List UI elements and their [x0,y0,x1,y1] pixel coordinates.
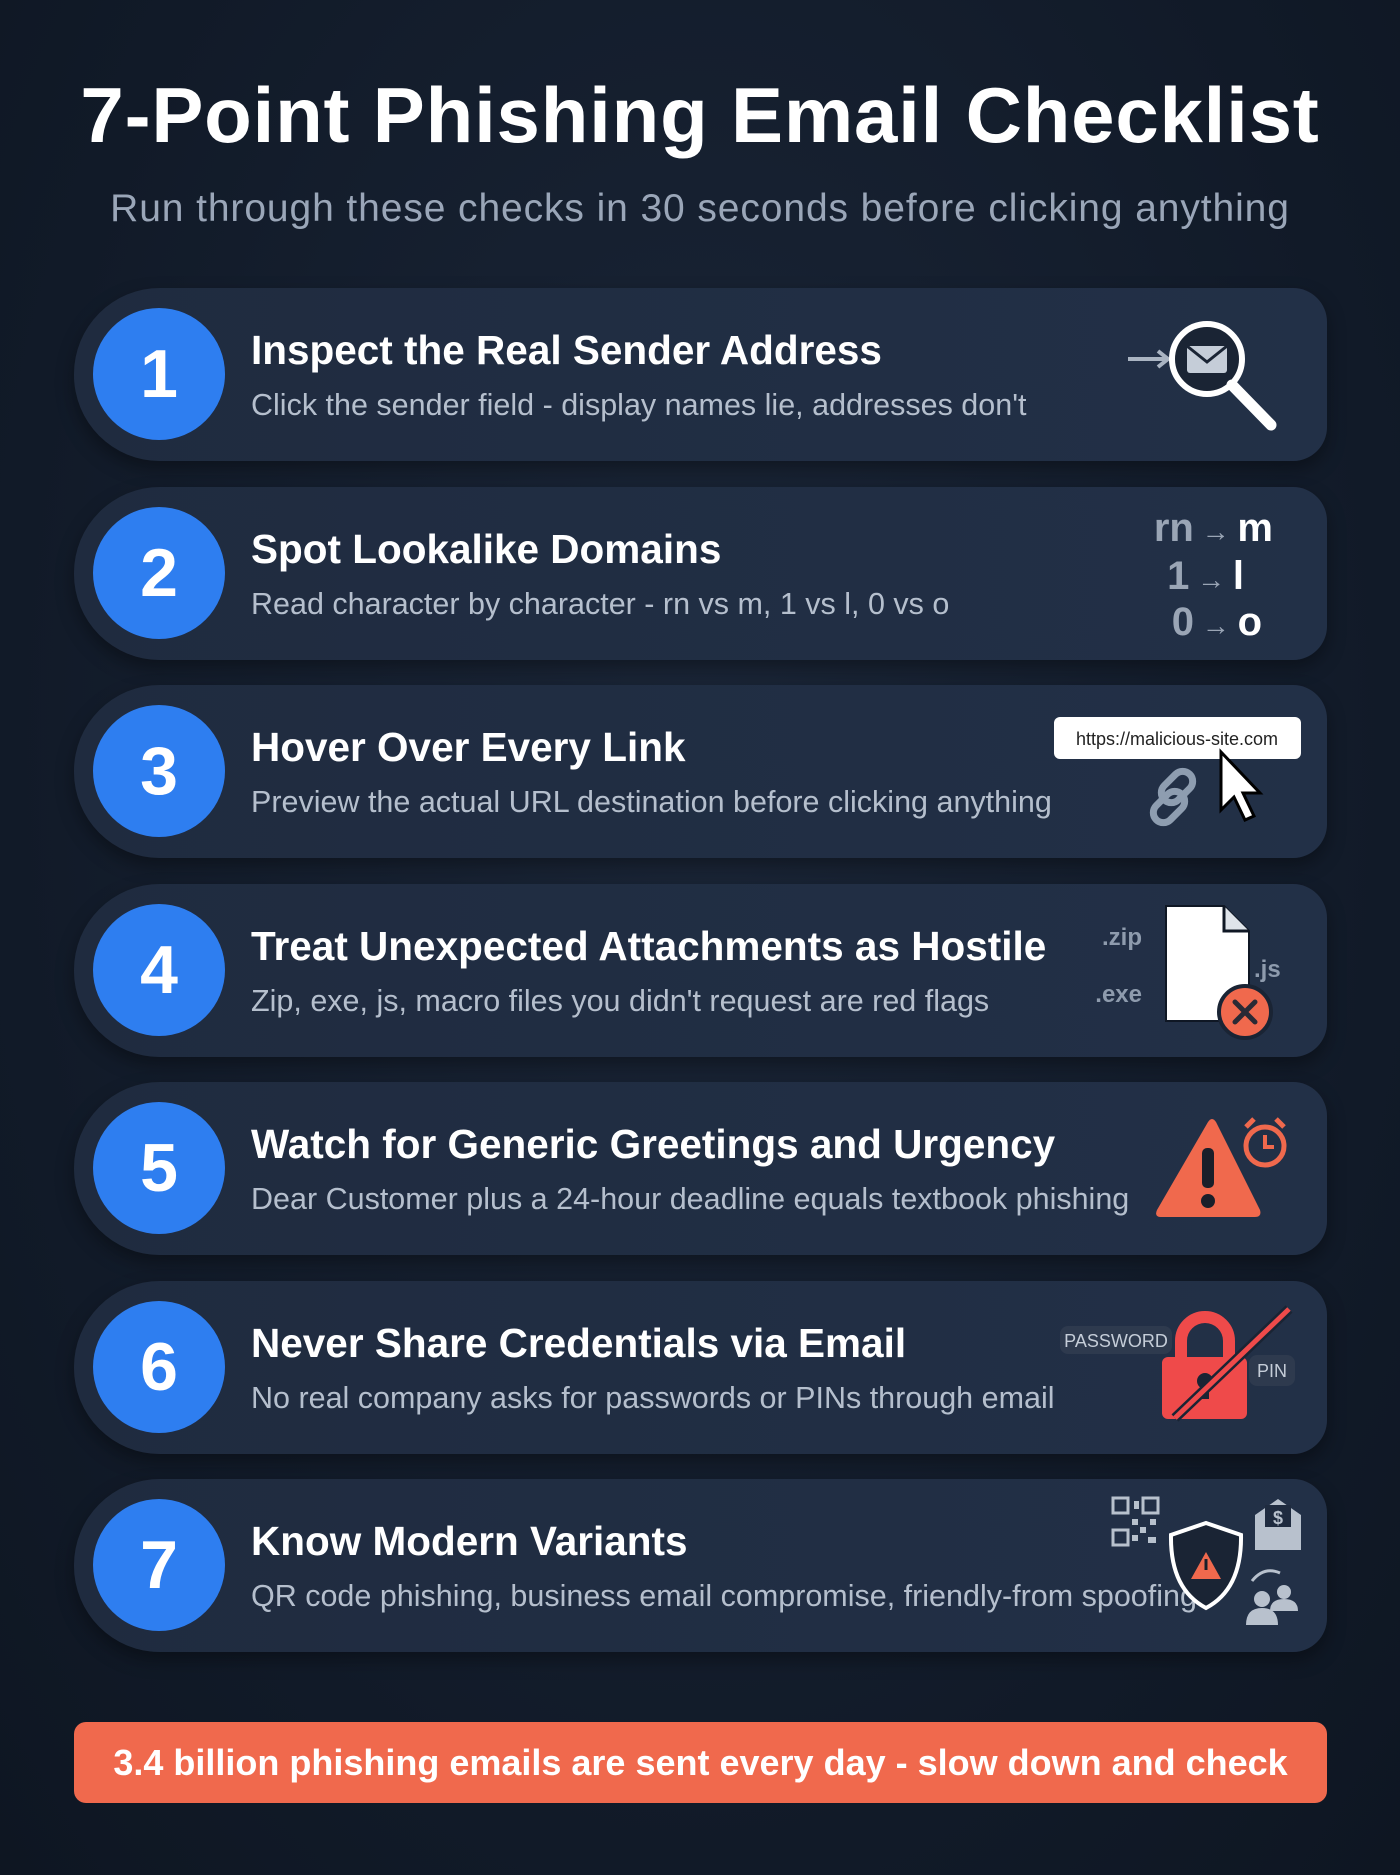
callout: stat banner: 3.4 billion phishing emails are sent every day - slow down and check [113,1742,1288,1783]
number 4 [93,904,225,1036]
title: 7-Point Phishing Email Checklist [80,71,1320,159]
panel: card 2 [74,486,1327,660]
panel: card 1 [74,288,1327,461]
icon: crossed lock [1060,1306,1295,1422]
number 7: 7 [140,1527,178,1603]
number 5: 5 [140,1130,178,1206]
icon: character swaps [1154,506,1273,644]
panel: card 7 [74,1479,1327,1652]
panel: card 4 [74,884,1327,1056]
heading 1: Inspect the Real Sender Address [251,327,882,373]
icon: crossed lock: PIN [1257,1360,1287,1380]
number 1 [93,308,225,440]
icon: blocked file: .js [1254,956,1281,982]
callout: stat banner [74,1722,1327,1803]
heading 3: Hover Over Every Link [251,724,685,770]
text 5: Dear Customer plus a 24-hour deadline equals textbook phishing [251,1182,1129,1216]
icon: character swaps: rn → m [1154,506,1273,550]
panel: card 3 [74,685,1327,858]
text 1: Click the sender field - display names lie, addresses don't [251,388,1026,422]
icon: character swaps: 0 → o [1172,600,1262,644]
number 2 [93,506,225,638]
number 5 [93,1102,225,1234]
panel: card 5 [74,1082,1327,1255]
text 2: Read character by character - rn vs m, 1 vs l, 0 vs o [251,586,949,620]
icon: blocked file: .zip [1102,924,1142,950]
icon: crossed lock: PASSWORD [1064,1330,1168,1350]
number 3 [93,705,225,837]
number 1: 1 [140,336,178,412]
icon: blocked file [1095,905,1281,1040]
heading 6: Never Share Credentials via Email [251,1320,906,1366]
heading 5: Watch for Generic Greetings and Urgency [251,1121,1055,1167]
icon: magnifier envelope [1128,321,1276,430]
number 6: 6 [140,1328,178,1404]
heading 7: Know Modern Variants [251,1518,688,1564]
icon: warning and alarm [1156,1117,1286,1217]
number 4: 4 [140,932,178,1008]
icon: modern variants cluster: $ [1273,1508,1283,1528]
icon: link tooltip and cursor [1054,717,1301,826]
panel: card 6 [74,1280,1327,1454]
text 7: QR code phishing, business email compromise, friendly-from spoofing [251,1579,1197,1613]
icon: character swaps: 1 → l [1167,554,1244,598]
number 3: 3 [140,733,178,809]
icon: blocked file: .exe [1095,980,1142,1008]
number 6 [93,1300,225,1432]
text 6: No real company asks for passwords or PINs through email [251,1380,1054,1414]
text 4: Zip, exe, js, macro files you didn't request are red flags [251,984,989,1018]
subtitle: Run through these checks in 30 seconds before clicking anything [110,187,1290,230]
text 3: Preview the actual URL destination before clicking anything [251,785,1052,819]
heading 4: Treat Unexpected Attachments as Hostile [251,922,1046,968]
number 2: 2 [140,534,178,610]
heading 2: Spot Lookalike Domains [251,526,721,572]
icon: link tooltip and cursor: https://malicious-site.com [1076,729,1278,749]
number 7 [93,1499,225,1631]
icon: modern variants cluster [1112,1496,1301,1625]
